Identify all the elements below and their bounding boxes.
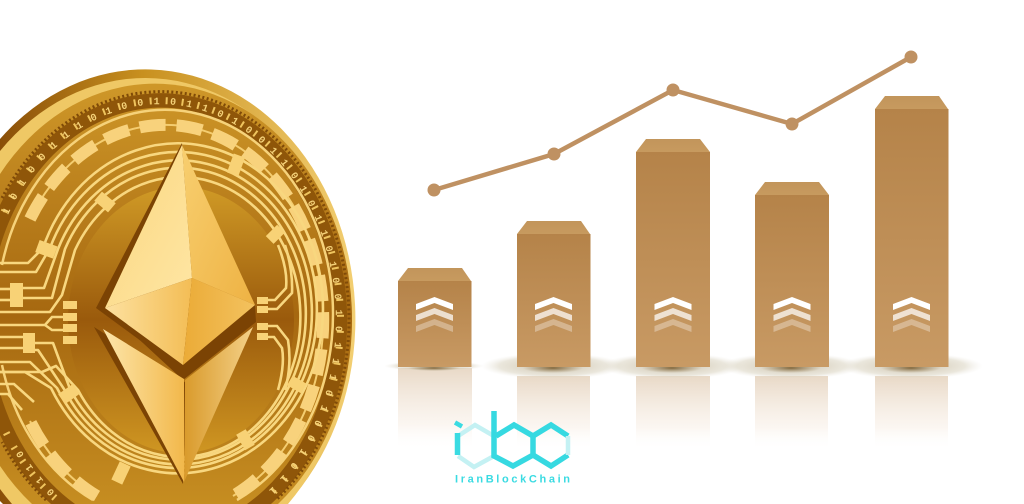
bar 5 <box>875 96 948 367</box>
band ticks <box>4 101 341 498</box>
centre right facet <box>183 278 255 365</box>
upper right facet <box>182 145 255 305</box>
bar contact shadows <box>408 363 941 373</box>
bar 1 <box>398 268 472 367</box>
binary band background <box>0 93 347 504</box>
serrated outer edge <box>2 92 349 500</box>
inner disk <box>68 187 294 453</box>
left circuit pads <box>10 154 306 485</box>
coin face <box>0 84 352 504</box>
lower left facet <box>103 329 184 482</box>
bar floor shadows <box>384 353 983 379</box>
binary digit ring, lower left: 0110 <box>16 452 54 496</box>
diamond left dark outline <box>96 143 192 372</box>
concentric circuit traces <box>0 143 323 473</box>
bar reflections <box>398 368 948 450</box>
bar 2 <box>517 221 590 367</box>
ethereum diamond <box>94 143 256 484</box>
lower right facet <box>184 327 253 482</box>
left circuit lines <box>0 289 63 410</box>
dark band under upper diamond <box>105 305 256 380</box>
lower dark outline <box>94 327 187 484</box>
ring divider line <box>2 110 333 500</box>
centre left facet <box>105 278 192 365</box>
outer chip link line <box>30 125 323 496</box>
gold ethereum coin <box>0 69 356 504</box>
right circuit pads and traces <box>257 245 292 390</box>
bar chart <box>398 96 948 367</box>
logo: IranBlockChain <box>455 411 570 486</box>
upper left facet <box>105 145 192 308</box>
bar 4 <box>755 182 829 367</box>
outer chip segments <box>30 125 323 496</box>
logo hexagon mark <box>455 411 568 467</box>
bar 3 <box>636 139 710 367</box>
coin edge <box>0 69 355 504</box>
logo wordmark: IranBlockChain <box>455 474 570 486</box>
trend line <box>428 50 918 196</box>
coin rim <box>0 78 350 504</box>
